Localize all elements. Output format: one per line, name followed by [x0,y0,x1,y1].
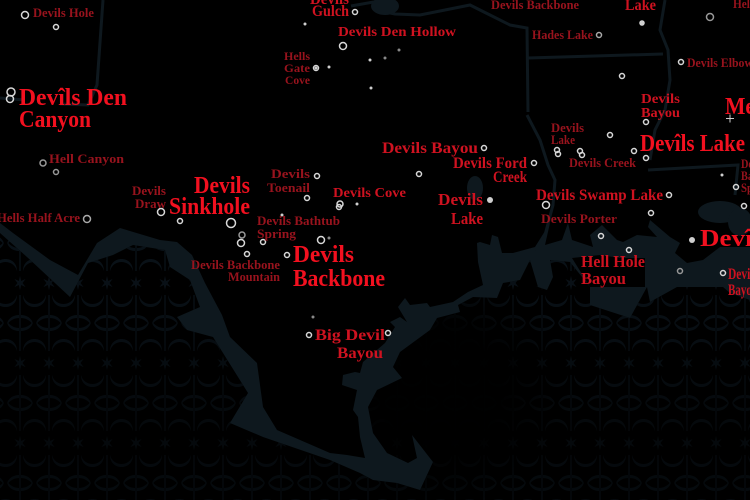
label: fragment right edge [741,157,750,195]
label: Big Devil Bayou [315,327,386,362]
label: Devils Ford Creek [453,155,527,186]
label: Devils Bayou far east [728,266,750,299]
label: Devils Creek: Devils Creek [569,156,636,170]
label: Devils Backbone Mountain: Devils Backbone [191,258,280,272]
label: Devils Draw [132,184,166,211]
label: Devils Lake north: Devils [551,121,584,135]
label: Hell Canyon: Hell Canyon [49,152,124,166]
label: Big Devil Bayou: Bayou [337,345,383,362]
label: Devils Lake central: Devils [438,190,483,209]
label: Devils Backbone: Backbone [293,266,385,292]
label: Hades Lake: Hades Lake [532,28,593,42]
place markers [6,10,746,338]
label: Hells Gate Cove: Gate [284,61,311,75]
label: Big Devil Bayou: Big Devil [315,327,386,344]
label: Devils Bayou east [641,92,681,121]
label: Devils Backbone Mountain [191,258,280,284]
label: Devils Ford Creek: Devils Ford [453,155,527,172]
label: Devils Bathtub Spring: Spring [257,227,297,241]
label: Devils Sinkhole [169,173,250,220]
label: Devils Lake central: Lake [451,209,483,228]
label: Devils Toenail: Toenail [267,181,311,195]
label: Devils Gulch: Gulch [312,3,349,20]
label: Devils Bayou: Devils Bayou [382,140,478,157]
label: Devils Backbone Mountain: Mountain [228,270,280,284]
label: Devils Lake central [438,190,483,228]
label: Devils Sinkhole: Devils [194,173,250,199]
label: Hell Hole Bayou: Hell Hole [581,252,645,271]
label: Devils Porter: Devils Porter [541,212,617,226]
label: Devils Bathtub Spring [257,214,340,241]
label backing: Devils east [696,225,750,258]
pattern fade near bay [305,265,575,500]
label: Devils Swamp Lake: Devils Swamp Lake [536,187,663,204]
state borders and rivers [0,0,750,250]
label: Devils Den Canyon [19,85,127,133]
label backing: Hell Hole Bayou [572,255,645,287]
label: Devils Ford Creek: Creek [493,169,527,186]
label: Devils Lake north [551,121,584,147]
label: Devils Backbone [293,242,385,292]
label: Devils Den Hollow: Devils Den Hollow [338,25,457,40]
label: Devils Lake north: Lake [551,133,575,147]
label: Hell Hole Bayou [581,252,645,288]
label: Devils Hole: Devils Hole [33,6,94,20]
label: Devils Draw: Devils [132,184,166,198]
label: Hells Gate Cove [284,49,311,87]
label: Devils Den Canyon: Devîls Den [19,85,127,111]
label: Devils Draw: Draw [135,197,166,211]
label: Hell Hole Bayou: Bayou [581,269,626,288]
label: Hells Gate Cove: Cove [285,73,311,87]
label: Devils Sinkhole: Sinkhole [169,194,250,220]
label: Devils Bayou east: Devils [641,92,681,107]
label: Devils Bathtub Spring: Devils Bathtub [257,214,340,228]
label: Devils Den Canyon: Canyon [19,107,91,133]
label: Devils Backbone: Devils [293,242,354,268]
label: Devils Cove: Devils Cove [333,185,406,200]
label: Devils Toenail: Devils [271,167,310,181]
coastline band [0,220,750,490]
label: Hells Gate Cove: Hells [284,49,310,63]
pattern fade lower [0,270,750,500]
label: Devils Toenail [267,167,311,195]
label: Devils Bayou east: Bayou [641,106,680,121]
